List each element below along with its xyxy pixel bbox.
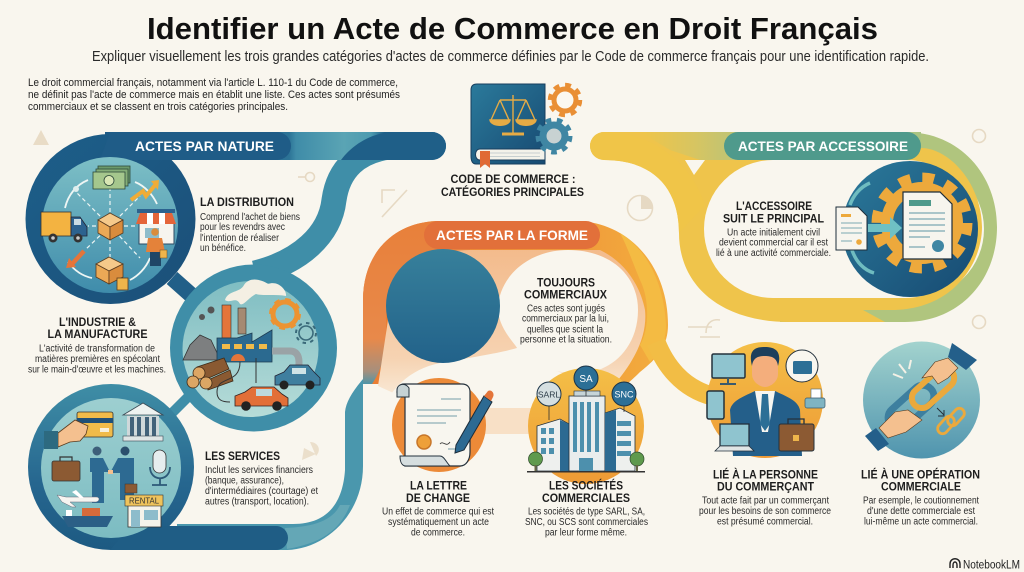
text: industrie: L'INDUSTRIE & [59,317,136,329]
suit [730,391,802,456]
peach fade [484,408,534,434]
phone [707,391,724,419]
bills [93,166,130,189]
text: les services: LES SERVICES [205,451,280,463]
shop [139,222,174,244]
speech bubble [786,350,818,382]
rocks [183,335,218,360]
text: code de commerce label: CODE DE COMMERCE : [450,174,576,186]
plane [57,495,99,507]
text: la distribution [200,197,300,254]
icon: sociétés buildings: SARL [538,390,560,400]
text: la lettre de change: DE CHANGE [406,493,470,505]
laptop [720,424,749,446]
text: l'accessoire: SUIT LE PRINCIPAL [723,214,824,226]
yellow left curve [590,132,705,233]
text: toujours commerciaux: TOUJOURS [537,278,595,290]
intro text: commerciaux et se classent en trois catégories principales. [28,101,288,113]
blue gear [543,125,565,147]
gear teeth [877,178,967,268]
pill: actes par nature: ACTES PAR NATURE [135,139,274,154]
text: industrie: sur le main-d'œuvre et les machines. [28,364,166,376]
text: la lettre de change: LA LETTRE [410,480,467,492]
briefcase [52,461,80,481]
text: lié à une opération: lui-même un acte commercial. [864,516,978,528]
businessmen [92,446,102,456]
text: toujours commerciaux: commerciaux par la lui, [522,314,609,324]
connecting teal band [177,379,363,550]
bottom bar [110,526,288,550]
text: l'accessoire [716,201,831,259]
bank [123,403,163,415]
icon: distribution scene [41,157,178,293]
circle 3 [28,384,194,550]
circle 1 [26,134,196,304]
scales [490,95,536,134]
intro text: ne définit pas l'acte de commerce mais en établit une liste. Ces actes sont présumés [28,89,400,101]
text: les services: (banque, assurance), [205,476,284,486]
text: les sociétés: LES SOCIÉTÉS [549,480,623,492]
text: les sociétés: Les sociétés de type SARL, SA, [528,506,645,518]
icon: sociétés buildings [527,366,645,484]
text: industrie: LA MANUFACTURE [48,329,148,341]
customer [151,228,159,236]
intro text [28,77,400,113]
text: lié à la personne: DU COMMERÇANT [717,482,814,494]
text: industrie [28,317,166,376]
book cover [471,84,545,164]
text: la distribution: LA DISTRIBUTION [200,197,294,209]
pill: actes par la forme: ACTES PAR LA FORME [436,228,588,243]
blue car [275,365,320,385]
text: les sociétés: par leur forme même. [545,528,627,538]
card [77,412,113,437]
logs [187,358,233,390]
icon: lettre de change [392,378,494,472]
arrows [217,358,256,402]
gear ring [887,188,957,258]
text: la lettre de change [382,480,494,538]
neck 1 [172,278,199,302]
chimneys [222,305,231,338]
icon: sociétés buildings: SNC [614,390,634,400]
text: l'accessoire: Un acte initialement civil [727,228,820,238]
cream cavity letter [372,347,600,480]
yellow band [590,132,980,322]
text: la lettre de change: systématiquement un acte [388,517,489,528]
yellow arc cover [905,148,982,300]
text: toujours commerciaux [520,278,612,346]
hand [58,420,88,447]
upper cuff [948,343,977,370]
text: la lettre de change: Un effet de commerce qui est [382,506,494,518]
text: lié à une opération: d'une dette commerciale est [867,506,975,517]
orange left blend [363,221,470,384]
pill: actes par nature [100,132,291,160]
decorative marks [33,130,986,460]
lower cuff [865,428,889,451]
text: lié à une opération [861,468,980,528]
neck 2 [165,390,195,420]
truck [41,212,71,236]
text: lié à une opération: LIÉ À UNE OPÉRATION [861,468,980,482]
briefcase [779,424,814,451]
icon: gear and documents [836,161,978,297]
pen [455,396,492,453]
balloons [549,390,624,420]
tie [760,394,770,431]
text: lié à la personne [699,468,831,528]
text: les services: Inclut les services financiers [205,465,313,476]
growth arrow [131,184,156,200]
text: industrie: matières premières en spécolant [35,354,160,365]
icon: factory scene [182,280,320,417]
blue link [884,381,938,433]
icon: code de commerce book [471,84,580,168]
monitor [712,354,745,378]
panel: actes par la forme band [363,221,668,480]
small doc [836,207,867,250]
small chain [936,414,956,436]
lower hand [879,410,922,438]
text: la distribution: pour les revendrs avec [200,222,285,233]
yellow stripe [620,233,666,362]
arrow [868,217,902,239]
rays [893,360,911,378]
pages [476,149,545,160]
orange car [235,387,288,406]
text: toujours commerciaux: personne et la situation. [520,334,612,346]
printer [811,389,821,399]
arrow [937,408,944,416]
blue disc [386,249,500,363]
text: les services [205,451,318,508]
text: code de commerce label [441,174,584,199]
text: toujours commerciaux: COMMERCIAUX [524,290,607,302]
text: la lettre de change: de commerce. [411,528,465,538]
text: les sociétés [525,480,648,538]
bottom box [96,257,128,290]
text: lié à la personne: est présumé commercial. [717,516,813,528]
icon: sociétés buildings: SA [579,374,593,385]
text: les services: d'intermédiaires (courtage) et [205,486,318,497]
down arrow [72,251,84,264]
text: lié à la personne: Tout acte fait par un commerçant [702,496,829,506]
text: industrie: L'activité de transformation de [39,344,155,354]
text: l'accessoire: L'ACCESSOIRE [736,201,812,213]
cavity [704,160,984,298]
arrow: yellow branch to person [656,342,712,396]
upper hand [922,358,958,384]
text: l'accessoire: lié à une activité commerciale. [716,248,831,259]
text: lié à la personne: pour les besoins de son commerce [699,506,831,517]
face [752,350,778,387]
pill: actes par accessoire [724,132,921,160]
shirt [755,391,775,432]
toujours blob [498,250,638,373]
factory body [217,330,272,362]
bar gradient [640,132,921,160]
text: la distribution: l'intention de réaliser [200,233,280,244]
icon: chain operation [863,342,980,458]
text: les sociétés: COMMERCIALES [542,493,630,505]
text: code de commerce label: CATÉGORIES PRINCIPALES [441,186,584,199]
notch [685,160,705,175]
buildings [537,419,569,471]
panel: actes par nature band [26,132,446,550]
text: les services: autres (transport, location). [205,496,309,508]
icon: services scene [41,398,181,538]
big doc [903,192,952,259]
ship [62,516,113,527]
bookmark [480,151,490,168]
text: la distribution: Comprend l'achet de biens [200,212,300,223]
pill: actes par accessoire: ACTES PAR ACCESSOIRE [738,139,908,154]
curved arrows [850,183,874,273]
green outer band [700,132,997,322]
peach interior [378,250,645,405]
center box [98,213,123,240]
rental shop [128,505,161,527]
title: Identifier un Acte de Commerce en Droit Français [147,12,878,46]
mic [153,450,166,473]
top bar [105,132,446,160]
text: la distribution: un bénéfice. [200,243,246,254]
trees [528,452,542,466]
circle 2 [170,264,337,432]
text: lié à une opération: Par esemple, le coutionnement [863,496,979,506]
ground [527,471,645,472]
outline gear [299,326,313,340]
hair [751,347,779,366]
icon: person commerçant [707,342,825,458]
text: toujours commerciaux: quelles que scient la [527,324,603,336]
text: l'accessoire: devient commercial car il est [719,238,828,248]
text: toujours commerciaux: Ces actes sont jugés [527,304,605,314]
text: lié à la personne: LIÉ À LA PERSONNE [713,468,818,482]
orange gear [273,302,297,326]
icon: services scene: RENTAL [129,496,160,506]
text: les sociétés: SNC, ou SCS sont commerciales [525,517,648,528]
text: lié à une opération: COMMERCIALE [881,482,961,494]
panel: actes par accessoire band [590,132,997,322]
pipe [272,351,299,366]
orange band [363,221,668,410]
pill: actes par la forme [424,221,600,249]
gold link [908,364,958,412]
orange gear [554,89,576,111]
smoke [225,280,286,304]
intro text: Le droit commercial français, notamment via l'article L. 110-1 du Code de commerce, [28,77,398,89]
